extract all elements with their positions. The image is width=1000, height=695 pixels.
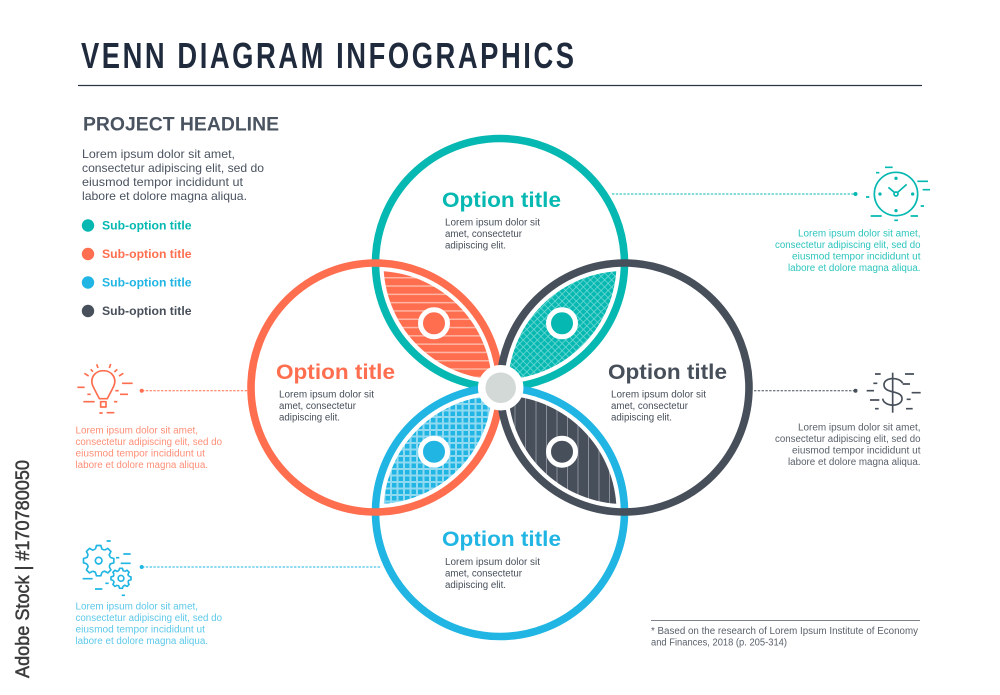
footnote: * Based on the research of Lorem Ipsum Institute of Economy <box>651 626 918 637</box>
callout: dark text: Lorem ipsum dolor sit amet, <box>798 422 920 434</box>
legend <box>82 218 192 318</box>
legend: Sub-option title <box>102 304 192 318</box>
icon: dollar <box>867 373 921 413</box>
option: bottom: amet, consectetur <box>445 568 523 580</box>
heading: project headline: PROJECT HEADLINE <box>83 114 279 136</box>
connector: teal <box>612 192 858 196</box>
callout: dark text <box>775 422 921 468</box>
option: left: Option title <box>276 361 395 384</box>
callout: blue text: consectetur adipiscing elit, sed do <box>76 613 222 624</box>
circle: teal top <box>376 138 624 388</box>
option: left: Lorem ipsum dolor sit <box>279 390 374 400</box>
callout: orange text: Lorem ipsum dolor sit amet, <box>76 426 198 436</box>
callout: orange text: eiusmod tempor incididunt ut <box>76 448 205 460</box>
option: left: adipiscing elit. <box>279 412 340 424</box>
callout: teal text <box>775 228 921 274</box>
option: bottom: Option title <box>442 528 561 551</box>
option: left: amet, consectetur <box>279 401 357 412</box>
project description <box>82 147 264 203</box>
option: bottom: Lorem ipsum dolor sit <box>445 557 540 568</box>
option: bottom: adipiscing elit. <box>445 580 506 591</box>
center hub <box>482 369 520 407</box>
marker: orange <box>420 310 448 337</box>
panel: project headline <box>82 114 279 318</box>
option: right: Option title <box>608 361 727 384</box>
venn diagram <box>251 138 749 636</box>
option: right: amet, consectetur <box>611 401 689 412</box>
callout: dark text: consectetur adipiscing elit, sed do <box>775 434 921 445</box>
option: right: adipiscing elit. <box>611 412 672 424</box>
legend: Sub-option title <box>102 247 192 261</box>
connector: orange <box>140 389 247 393</box>
marker: teal <box>548 310 576 337</box>
option: top: amet, consectetur <box>445 229 523 240</box>
petal: blue grid <box>384 396 492 504</box>
callout: dark text: eiusmod tempor incididunt ut <box>792 446 921 456</box>
marker: dark <box>548 438 576 465</box>
callout: blue text: Lorem ipsum dolor sit amet, <box>76 602 198 612</box>
circle: blue bottom <box>376 388 624 636</box>
project description: labore et dolore magna aliqua. <box>82 189 247 203</box>
connector: dark <box>754 389 858 393</box>
option: top: Option title <box>442 189 561 212</box>
circle: dark right <box>500 263 749 512</box>
petal: orange striped <box>384 271 492 379</box>
project description: consectetur adipiscing elit, sed do <box>82 161 264 175</box>
option: right <box>608 361 727 424</box>
footnote: and Finances, 2018 (p. 205-314) <box>651 638 787 648</box>
callout: blue text: eiusmod tempor incididunt ut <box>76 624 205 636</box>
connector: blue <box>140 565 380 569</box>
option: bottom <box>442 528 561 591</box>
legend: Sub-option title <box>102 276 192 290</box>
petal: dark vertical lines <box>508 396 616 504</box>
callout: orange text <box>76 426 222 471</box>
marker: blue <box>420 438 448 465</box>
footnote <box>651 620 920 648</box>
callout: blue text: labore et dolore magna aliqua. <box>76 636 208 647</box>
title: VENN DIAGRAM INFOGRAPHICS <box>81 35 574 76</box>
option: top <box>442 189 561 252</box>
callout: teal text: eiusmod tempor incididunt ut <box>792 252 921 262</box>
callout: teal text: consectetur adipiscing elit, sed do <box>775 240 921 251</box>
callout: teal text: labore et dolore magna aliqua. <box>788 263 920 274</box>
callout: teal text: Lorem ipsum dolor sit amet, <box>798 228 920 240</box>
project description: Lorem ipsum dolor sit amet, <box>82 147 235 161</box>
project description: eiusmod tempor incididunt ut <box>82 175 244 189</box>
callout: dark text: labore et dolore magna aliqua. <box>788 457 920 468</box>
petal: teal crosshatch <box>508 271 616 379</box>
option: top: Lorem ipsum dolor sit <box>445 218 540 228</box>
watermark: stock credit: Adobe Stock | #170780050 <box>13 460 34 678</box>
callout: blue text <box>76 602 222 647</box>
icon: clock <box>866 167 930 220</box>
callout: orange text: labore et dolore magna aliqua. <box>76 460 208 471</box>
icon: light bulb <box>77 364 133 413</box>
callout: orange text: consectetur adipiscing elit, sed do <box>76 437 222 448</box>
legend: Sub-option title <box>102 218 192 232</box>
circle: orange left <box>251 263 500 512</box>
icon: gears <box>83 541 131 595</box>
option: top: adipiscing elit. <box>445 240 506 252</box>
option: left <box>276 361 395 424</box>
option: right: Lorem ipsum dolor sit <box>611 390 706 400</box>
title rule <box>78 84 922 86</box>
